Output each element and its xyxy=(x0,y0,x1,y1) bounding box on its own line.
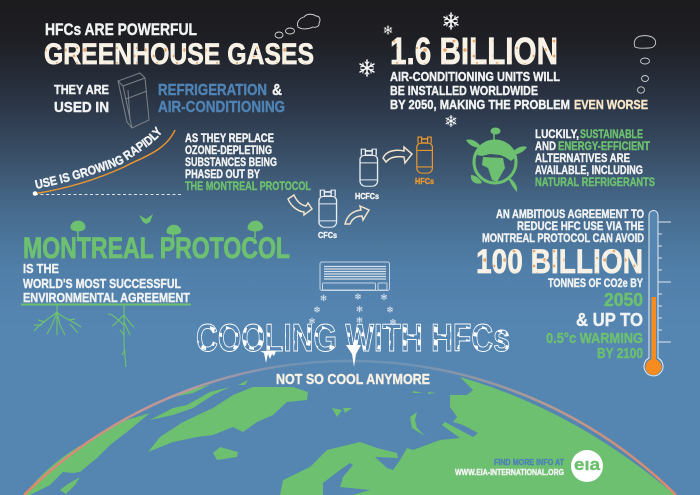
text: find more info: FIND MORE INFO AT xyxy=(494,458,564,467)
heading: HFCs are powerful greenhouse gases: GREENHOUSE GASES xyxy=(44,38,314,71)
text: world's most successful: WORLD'S MOST SUCCESSFUL xyxy=(23,276,181,291)
text: refrigeration and air-conditioning: REFRIGERATION xyxy=(158,82,267,99)
icon: trees xyxy=(71,221,263,242)
text: find more info xyxy=(455,458,564,477)
text: they are used in xyxy=(54,83,109,116)
icon: icicles xyxy=(260,345,361,367)
text: world's most successful: ENVIRONMENTAL AGREEMENT xyxy=(23,290,190,305)
text: as they replace xyxy=(185,131,311,193)
icon: thought cloud left xyxy=(275,14,320,38)
text: tonnes and warming: 0.5°c WARMING xyxy=(546,330,643,347)
icon: falling snow xyxy=(309,293,396,325)
arrow: to HCFCs xyxy=(345,206,369,224)
icon: CFC cylinder: CFCs xyxy=(318,231,338,240)
chart: growth curve: USE IS GROWING RAPIDLY xyxy=(34,126,162,189)
text: luckily sustainable: ALTERNATIVES ARE xyxy=(535,151,630,165)
icon: roots xyxy=(34,305,134,367)
text: world's most successful: IS THE xyxy=(23,261,59,276)
text: world's most successful xyxy=(21,261,191,305)
text: ambitious agreement: MONTREAL PROTOCOL CAN AVOID xyxy=(482,231,644,245)
land masses xyxy=(24,377,675,495)
arrow: to HFCs xyxy=(383,147,412,163)
text: as they replace: SUBSTANCES BEING xyxy=(185,155,277,169)
text: tonnes and warming: BY 2100 xyxy=(597,345,643,362)
text: tonnes and warming xyxy=(546,276,643,362)
heading: 1.6 billion: 1.6 BILLION xyxy=(390,31,558,73)
text: air-conditioning units xyxy=(390,69,648,112)
heading: Montreal Protocol: MONTREAL PROTOCOL xyxy=(23,232,290,265)
text: luckily sustainable: NATURAL REFRIGERANTS xyxy=(535,175,655,189)
text: luckily sustainable: AND xyxy=(535,139,556,153)
baltic sea xyxy=(323,463,370,495)
atmosphere rim xyxy=(24,361,676,495)
icon: HCFC cylinder: HCFCs xyxy=(355,192,379,201)
text: luckily sustainable: SUSTAINABLE xyxy=(580,127,643,141)
text: air-conditioning units: AIR-CONDITIONING UNITS WILL xyxy=(390,69,560,84)
text: refrigeration and air-conditioning xyxy=(158,82,285,116)
earth xyxy=(24,361,676,495)
text: as they replace: THE MONTREAL PROTOCOL xyxy=(185,179,311,193)
text: ambitious agreement xyxy=(482,207,644,245)
icon: fridge xyxy=(118,73,149,128)
logo: EIA: eıa xyxy=(574,455,601,474)
text: luckily sustainable xyxy=(535,127,655,189)
icon: snowflakes xyxy=(360,13,458,127)
text: luckily sustainable: AVAILABLE, INCLUDING xyxy=(535,163,643,177)
text: ambitious agreement: REDUCE HFC USE VIA THE xyxy=(517,219,644,233)
heading: HFCs are powerful greenhouse gases: HFCs ARE POWERFUL xyxy=(45,21,197,39)
icon: green globe xyxy=(466,128,527,192)
icon: CFC cylinder xyxy=(318,190,338,240)
text: luckily sustainable: ENERGY-EFFICIENT xyxy=(558,139,651,153)
text: find more info: WWW.EIA-INTERNATIONAL.ORG xyxy=(455,468,564,477)
text: refrigeration and air-conditioning: & xyxy=(272,82,282,99)
icon: thought cloud right xyxy=(634,36,656,93)
text: tonnes and warming: 2050 xyxy=(604,290,643,310)
icon: HFC cylinder xyxy=(415,137,435,186)
icon: HFC cylinder: HFCs xyxy=(415,177,435,186)
text: luckily sustainable: LUCKILY, xyxy=(535,127,579,141)
text: as they replace: OZONE-DEPLETING xyxy=(185,143,272,157)
text: refrigeration and air-conditioning: AIR-CONDITIONING xyxy=(158,99,285,116)
text: air-conditioning units: BE INSTALLED WORLDWIDE xyxy=(390,83,538,98)
text: as they replace: PHASED OUT BY xyxy=(185,167,260,181)
icon: HCFC cylinder xyxy=(355,149,379,201)
text: tonnes and warming: & UP TO xyxy=(576,310,643,330)
icon: bird xyxy=(139,214,153,224)
text: air-conditioning units: EVEN WORSE xyxy=(574,97,648,112)
text: tonnes and warming: TONNES OF CO2e BY xyxy=(548,276,643,290)
text: ambitious agreement: AN AMBITIOUS AGREEMENT TO xyxy=(496,207,644,221)
heading: 100 billion: 100 BILLION xyxy=(476,243,643,281)
title: Cooling with HFCs xyxy=(196,317,510,367)
text: as they replace: AS THEY REPLACE xyxy=(185,131,274,145)
logo: EIA xyxy=(571,450,603,482)
icon: air conditioner xyxy=(320,262,390,290)
text: not so cool anymore: NOT SO COOL ANYMORE xyxy=(276,371,430,388)
text: they are used in: USED IN xyxy=(54,100,109,116)
arrow: to CFCs xyxy=(288,195,312,215)
text: air-conditioning units: BY 2050, MAKING THE PROBLEM xyxy=(390,97,570,112)
chart: thermometer xyxy=(644,210,671,376)
title: Cooling with HFCs: COOLING WITH HFCs xyxy=(196,317,510,360)
heading: HFCs are powerful greenhouse gases xyxy=(44,21,314,71)
text: they are used in: THEY ARE xyxy=(54,83,109,97)
